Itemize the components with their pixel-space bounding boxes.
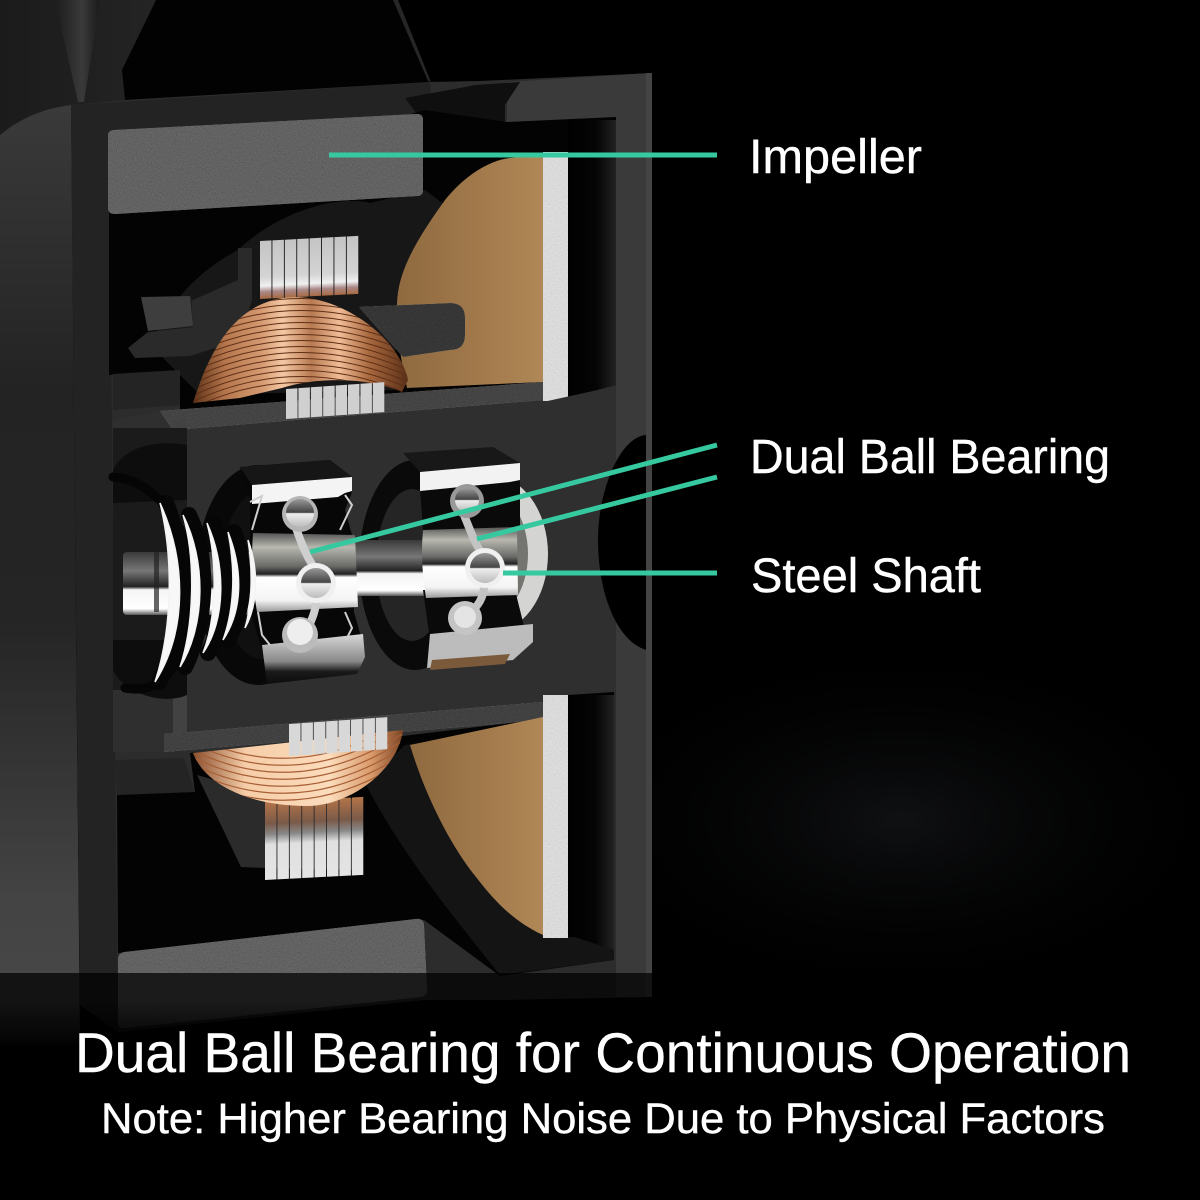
lower tabs <box>265 797 363 880</box>
upper tabs <box>260 236 358 299</box>
rear bearing rings <box>196 460 471 685</box>
leader lines: dual ball bearing <box>310 445 717 552</box>
lower brown disc <box>410 717 543 935</box>
lower cavity <box>115 692 614 976</box>
leader line: impeller <box>329 152 717 158</box>
label: steel shaft: Steel Shaft <box>751 550 981 603</box>
lower copper coil <box>193 730 403 806</box>
right ball bearing <box>403 447 548 670</box>
fan blade at top left <box>0 0 431 135</box>
impeller magnet upper <box>108 114 423 214</box>
left outer wall <box>0 105 80 1045</box>
note: Note: Higher Bearing Noise Due to Physical Factors <box>101 1095 1105 1143</box>
housing frame <box>71 73 652 1032</box>
upper brown disc <box>397 155 543 388</box>
left ball bearing <box>240 460 365 684</box>
bearing cavity left <box>113 428 187 699</box>
label: impeller: Impeller <box>749 131 922 184</box>
leader line: steel shaft <box>503 570 717 576</box>
lower stator block <box>197 775 362 870</box>
title: Dual Ball Bearing for Continuous Operation <box>75 1021 1131 1084</box>
lower tabs of upper coil <box>286 382 384 419</box>
lower white strip <box>543 695 568 938</box>
right hole <box>598 435 646 650</box>
stator rod <box>359 303 465 357</box>
caption bar <box>0 973 1200 1200</box>
label: dual ball bearing: Dual Ball Bearing <box>750 431 1110 484</box>
upper white strip <box>543 152 568 401</box>
spring coil <box>113 477 256 689</box>
middle bar <box>113 370 616 752</box>
upper cavity <box>109 110 616 410</box>
impeller magnet lower <box>118 919 427 1028</box>
upper stator block <box>128 248 252 358</box>
steel shaft <box>123 540 427 615</box>
upper tabs of lower coil <box>289 717 387 756</box>
upper copper coil <box>190 297 415 409</box>
